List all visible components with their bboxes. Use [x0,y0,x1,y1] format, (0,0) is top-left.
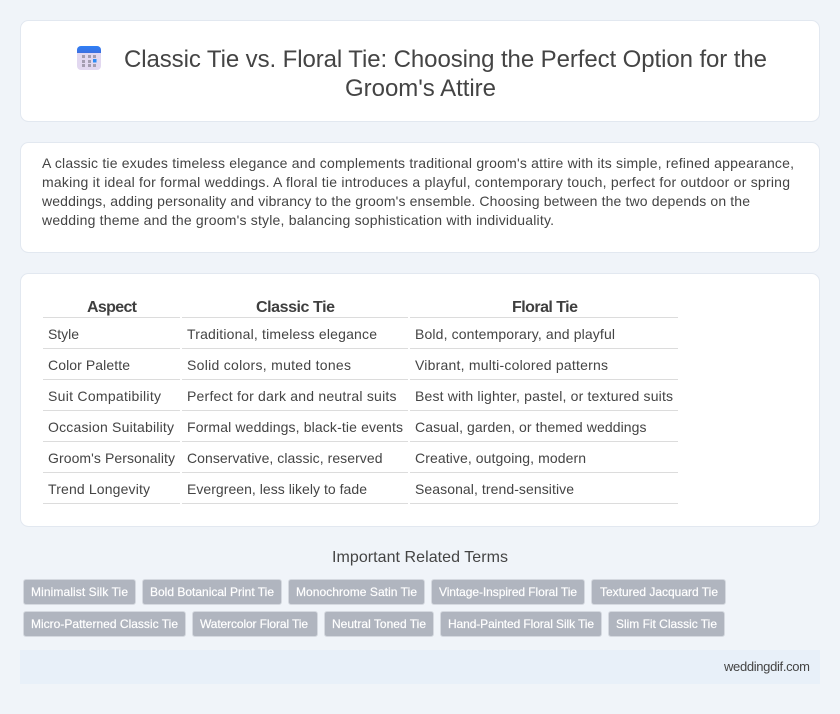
row: color palette: Solid colors, muted tones [187,357,351,373]
row: color palette: Color Palette [48,357,130,373]
tag group: related terms [24,580,726,636]
footer bar [20,650,820,684]
intro paragraph: wedding theme and the groom's style, balancing sophistication with individuality. [41,212,554,228]
table header: Aspect [87,299,138,316]
title: Classic Tie vs. Floral Tie: Choosing the Perfect Option for the [124,46,767,73]
tag: Vintage-Inspired Floral Tie [439,585,577,599]
tag: Monochrome Satin Tie [296,585,417,599]
row: occasion suitability: Formal weddings, black-tie events [187,419,403,435]
row: groom's personality: Groom's Personality [48,450,175,466]
tag [432,580,584,604]
row: occasion suitability: Casual, garden, or themed weddings [415,419,646,435]
panel: title card [20,20,820,122]
row: color palette: Vibrant, multi-colored patterns [415,357,608,373]
tag: Bold Botanical Print Tie [150,585,274,599]
row: trend longevity: Trend Longevity [48,481,150,497]
table header [87,299,578,316]
heading: important related terms: Important Related Terms [332,549,508,566]
tag: Slim Fit Classic Tie [616,617,717,631]
tag: Neutral Toned Tie [332,617,426,631]
intro paragraph: A classic tie exudes timeless elegance and complements traditional groom's attire with its simple, refined appearance, [42,155,794,171]
table header: Floral Tie [512,299,578,316]
tag: Minimalist Silk Tie [31,585,128,599]
row: occasion suitability [48,419,646,435]
tag: Micro-Patterned Classic Tie [31,617,178,631]
tag [440,612,602,636]
tag: Watercolor Floral Tie [200,617,308,631]
tag [288,580,424,604]
title: Groom's Attire [345,75,496,102]
row: suit compatibility [48,388,673,404]
row: groom's personality [48,450,586,466]
tag [592,580,726,604]
row: style: Bold, contemporary, and playful [415,326,615,342]
row: groom's personality: Conservative, classic, reserved [187,450,382,466]
tag: Hand-Painted Floral Silk Tie [448,617,594,631]
row: occasion suitability: Occasion Suitability [48,419,174,435]
tag [142,580,282,604]
tag [324,612,434,636]
tag [24,612,186,636]
row: trend longevity: Evergreen, less likely to fade [187,481,367,497]
row: suit compatibility: Perfect for dark and neutral suits [187,388,396,404]
tag: Textured Jacquard Tie [600,585,718,599]
row: color palette [48,357,608,373]
row: style [48,326,615,342]
row: suit compatibility: Suit Compatibility [48,388,161,404]
tag [192,612,318,636]
footer site name: weddingdif.com [723,659,810,674]
row: trend longevity [48,481,574,497]
panel: introduction [20,142,820,252]
panel: comparison table [20,274,820,526]
row: style: Style [48,326,79,342]
row: style: Traditional, timeless elegance [187,326,377,342]
row: trend longevity: Seasonal, trend-sensitive [415,481,574,497]
tag [608,612,724,636]
intro paragraph: making it ideal for formal weddings. A floral tie introduces a playful, contemporary touch, perfect for outdoor or spring [42,174,790,190]
row: suit compatibility: Best with lighter, pastel, or textured suits [415,388,673,404]
table header: Classic Tie [256,299,335,316]
row: groom's personality: Creative, outgoing, modern [415,450,586,466]
intro paragraph: weddings, adding personality and vibrancy to the groom's ensemble. Choosing between the two depends on the [41,193,750,209]
icon: calendar [77,46,101,70]
tag [24,580,136,604]
